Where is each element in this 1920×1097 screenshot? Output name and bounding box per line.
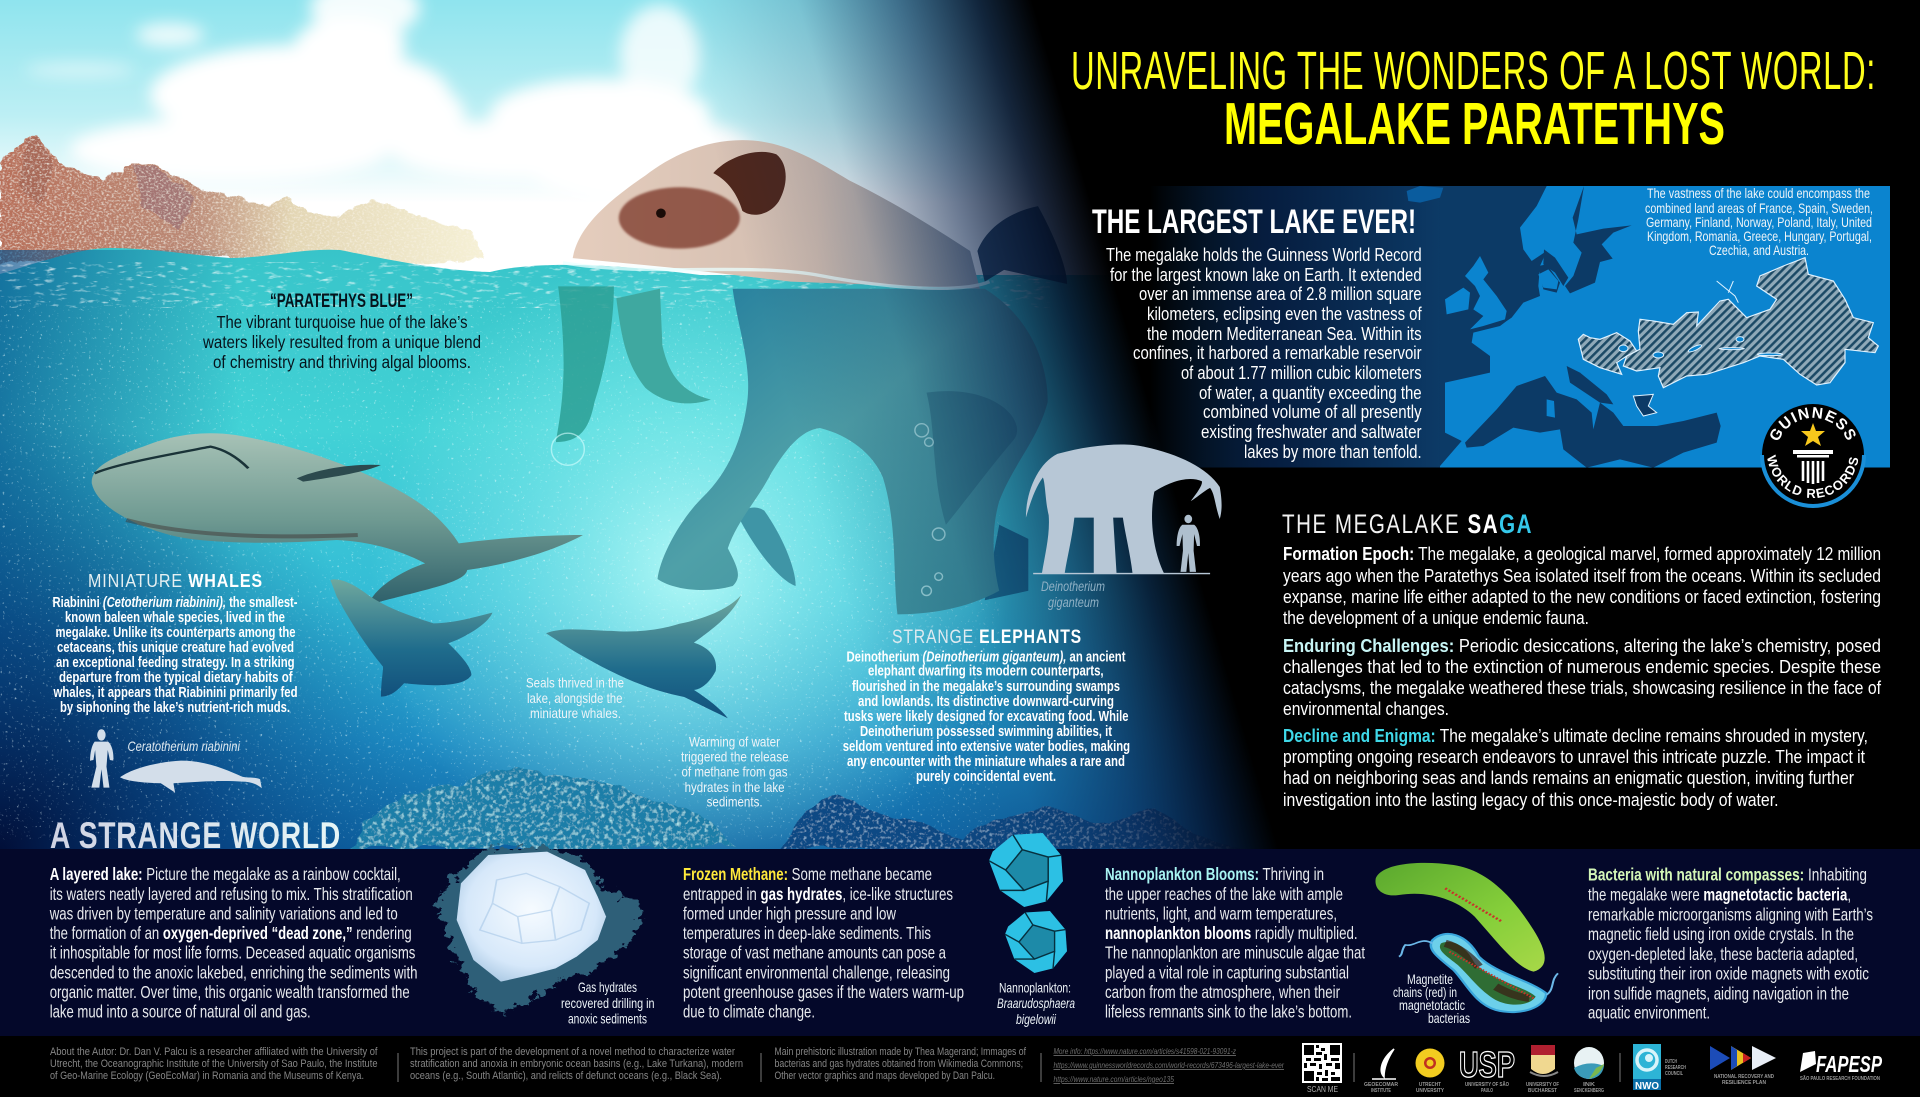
heading: miniature whales: MINIATURE WHALES bbox=[88, 570, 263, 591]
logo: University of Bucharest: UNIVERSITY OF bbox=[1526, 1082, 1559, 1088]
paragraph: enduring challenges: environmental changes. bbox=[1283, 699, 1449, 719]
icon: nannoplankton: Braarudosphaera bbox=[997, 995, 1075, 1011]
text block: whales: an exceptional feeding strategy. In a striking bbox=[56, 655, 295, 671]
image: gas hydrates: anoxic sediments bbox=[568, 1011, 647, 1027]
label: warming of water: of methane from gas bbox=[682, 764, 788, 780]
text block: whales: cetaceans, this unique creature had evolved bbox=[57, 640, 294, 656]
text block: nannoplankton blooms: the upper reaches of the lake with ample bbox=[1105, 884, 1343, 904]
label: seals: lake, alongside the bbox=[527, 690, 623, 706]
paragraph: decline and enigma bbox=[1283, 726, 1868, 810]
logo: NWO: COUNCIL bbox=[1665, 1071, 1683, 1077]
text block: saga bbox=[1283, 544, 1882, 810]
text block: nannoplankton blooms: played a vital role in capturing substantial bbox=[1105, 962, 1349, 982]
logo: FAPESP: FAPESP bbox=[1816, 1051, 1882, 1077]
footer bbox=[50, 1043, 1882, 1094]
footer text: about the author: of Geo-Marine Ecology (GeoEcoMar) in Romania and the Museums of Kenya. bbox=[50, 1070, 364, 1082]
logo: University of Sao Paulo: UNIVERSITY OF SÃO bbox=[1465, 1081, 1510, 1088]
text block: layered lake: the formation of an oxygen-deprived “dead zone,” rendering bbox=[50, 923, 412, 943]
text block: layered lake: descended to the anoxic lakebed, enriching the sediments with bbox=[50, 962, 417, 982]
logo: University of Bucharest bbox=[1526, 1045, 1559, 1094]
logo: GeoEcoMar bbox=[1364, 1049, 1398, 1094]
icon: Guinness World Records badge bbox=[1760, 404, 1866, 508]
text block: largest lake: combined volume of all presently bbox=[1203, 402, 1422, 422]
logo: GeoEcoMar: GEOECOMAR bbox=[1364, 1082, 1398, 1088]
image: magnetotactic bacteria bbox=[1375, 863, 1558, 1026]
main illustration: prehistoric lake scene bbox=[0, 0, 1400, 850]
text block: frozen methane: storage of vast methane amounts can pose a bbox=[683, 943, 946, 963]
Baltic Sea bbox=[1565, 186, 1632, 293]
text block: frozen methane: temperatures in deep-lake sediments. This bbox=[683, 923, 931, 943]
callout: Paratethys blue: of chemistry and thriving algal blooms. bbox=[213, 352, 471, 372]
text block: bacteria with natural compasses: Bacteria with natural compasses: Inhabiting bbox=[1588, 865, 1867, 885]
icon: Deinotherium size silhouette with human: Deinotherium bbox=[1041, 579, 1105, 594]
footer text: project: stratification and anoxia in embryonic ocean basins (e.g., Lake Turkana), modern bbox=[410, 1058, 743, 1070]
seal two bbox=[546, 595, 741, 718]
logo: NWO: DUTCH bbox=[1665, 1059, 1677, 1065]
label: warming of water: Warming of water bbox=[689, 734, 780, 750]
label: warming of water bbox=[681, 734, 789, 810]
icon: lower dodecahedron bbox=[1005, 911, 1067, 973]
paragraph: enduring challenges: Enduring Challenges: Periodic desiccations, altering the lake’s chemistry, posed bbox=[1283, 636, 1881, 656]
logo: University of Sao Paulo: PAULO bbox=[1481, 1088, 1493, 1094]
logo: national recovery and resilience plan: NATIONAL RECOVERY AND bbox=[1714, 1074, 1774, 1080]
hatched lake extent bbox=[1578, 258, 1878, 388]
paragraph: formation epoch: the development of a unique endemic fauna. bbox=[1283, 608, 1589, 628]
text block: frozen methane bbox=[683, 864, 964, 1022]
footer text: project: oceans (e.g., South Atlantic), and relicts of defunct oceans (e.g., Black Sea). bbox=[410, 1070, 722, 1082]
mountains bbox=[0, 136, 484, 263]
text block: largest lake bbox=[1106, 245, 1422, 462]
text block: largest lake: the modern Mediterranean Sea. Within its bbox=[1147, 324, 1422, 344]
logo: FAPESP bbox=[1800, 1051, 1882, 1082]
heading: the largest lake ever: THE LARGEST LAKE EVER! bbox=[1092, 203, 1416, 241]
callout: Paratethys blue bbox=[202, 291, 481, 372]
text block: elephants: purely coincidental event. bbox=[916, 769, 1056, 785]
footer text: project bbox=[410, 1046, 743, 1082]
text block: elephants: seldom ventured into extensive water bodies, making bbox=[843, 739, 1130, 755]
water body bbox=[0, 248, 1300, 850]
paragraph: enduring challenges bbox=[1283, 636, 1882, 719]
paragraph: decline and enigma: investigation into the lasting legacy of this once-majestic body of water. bbox=[1283, 790, 1778, 810]
text block: frozen methane: due to climate change. bbox=[683, 1002, 815, 1022]
sky with clouds bbox=[0, 0, 1300, 290]
logo: University of Bucharest: BUCHAREST bbox=[1528, 1088, 1558, 1094]
text block: largest lake: of water, a quantity exceeding the bbox=[1199, 383, 1422, 403]
panel: strange elephants bbox=[843, 627, 1130, 785]
text block: frozen methane: entrapped in gas hydrates, ice-like structures bbox=[683, 884, 953, 904]
text block: nannoplankton blooms: lifeless remnants sink to the lake’s bottom. bbox=[1105, 1002, 1352, 1022]
text block: layered lake bbox=[49, 864, 417, 1022]
text block: largest lake: for the largest known lake on Earth. It extended bbox=[1110, 265, 1422, 285]
image: gas hydrates: recovered drilling in bbox=[561, 995, 654, 1011]
text block: largest lake: existing freshwater and saltwater bbox=[1201, 422, 1422, 442]
text block: nannoplankton blooms bbox=[1105, 864, 1365, 1022]
callout: Paratethys blue: The vibrant turquoise hue of the lake’s bbox=[216, 312, 468, 332]
icon: nannoplankton bbox=[989, 833, 1075, 1027]
text block: layered lake: lake mud into a source of natural oil and gas. bbox=[50, 1002, 311, 1022]
image: magnetotactic bacteria: chains (red) in bbox=[1393, 984, 1457, 1000]
icon: Deinotherium size silhouette with human: giganteum bbox=[1048, 595, 1099, 610]
image: gas hydrates: Gas hydrates bbox=[578, 979, 637, 995]
panel: a strange world band bbox=[0, 815, 1920, 1036]
Mediterranean Sea bbox=[1465, 376, 1721, 468]
callout: Paratethys blue: “PARATETHYS BLUE” bbox=[270, 291, 413, 312]
heading: the megalake saga: THE MEGALAKE SAGA bbox=[1282, 509, 1533, 539]
footer text: more info links bbox=[1054, 1046, 1285, 1084]
logo: Utrecht University: UTRECHT bbox=[1419, 1082, 1442, 1088]
footer text: about the author bbox=[50, 1046, 378, 1082]
label: seals: Seals thrived in the bbox=[526, 674, 624, 690]
text block: elephants: elephant dwarfing its modern counterparts, bbox=[868, 664, 1104, 680]
text block: whales: whales, it appears that Riabinini primarily fed bbox=[53, 685, 298, 701]
text block: elephants: any encounter with the miniature whales a rare and bbox=[847, 754, 1125, 770]
text block: layered lake: it inhospitable for most life forms. Deceased aquatic organisms bbox=[50, 943, 416, 963]
text block: whales: known baleen whale species, lived in the bbox=[65, 610, 285, 626]
text block: largest lake: over an immense area of 2.8 million square bbox=[1139, 284, 1422, 304]
text block: elephants: Deinotherium possessed swimming abilities, it bbox=[860, 724, 1112, 740]
label: seals bbox=[526, 674, 624, 721]
text block: elephants: Deinotherium (Deinotherium giganteum), an ancient bbox=[846, 650, 1126, 666]
map panel: Europe with lake extent bbox=[1150, 185, 1890, 468]
image: gas hydrates bbox=[436, 847, 654, 1027]
logo: INK Senckenberg bbox=[1574, 1047, 1604, 1094]
icon: QR code bbox=[1302, 1043, 1342, 1094]
footer text: about the author: About the Autor: Dr. Dan V. Palcu is a researcher affiliated with the University of bbox=[50, 1046, 378, 1058]
fade to black over right side bbox=[0, 0, 1400, 850]
text block: layered lake: organic matter. Over time, this organic wealth transformed the bbox=[50, 982, 410, 1002]
icon: nannoplankton: bigelowii bbox=[1016, 1011, 1057, 1027]
text block: layered lake: its waters neatly layered and refusing to mix. This stratification bbox=[50, 884, 413, 904]
heading: a strange world: A STRANGE WORLD bbox=[50, 815, 341, 856]
text block: elephants: flourished in the megalake’s surrounding swamps bbox=[852, 679, 1120, 695]
paragraph: enduring challenges: challenges that led to the extinction of numerous endemic species. Despite these bbox=[1283, 657, 1881, 677]
callout: Paratethys blue: waters likely resulted from a unique blend bbox=[202, 332, 481, 352]
footer text: project: This project is part of the development of a novel method to characterize water bbox=[410, 1046, 735, 1058]
reef on the left of the lakebed bbox=[345, 770, 735, 849]
logo: INK Senckenberg: SENCKENBERG bbox=[1574, 1088, 1604, 1094]
footer text: more info links: https://www.nature.com/articles/ngeo135 bbox=[1054, 1074, 1174, 1084]
text block: frozen methane: potent greenhouse gases if the waters warm-up bbox=[683, 982, 964, 1002]
text block: nannoplankton blooms: The nannoplankton are minuscule algae that bbox=[1105, 943, 1365, 963]
text block: nannoplankton blooms: nannoplankton blooms rapidly multiplied. bbox=[1105, 923, 1358, 943]
size comparison: whale and human: Ceratotherium riabinini bbox=[128, 738, 241, 754]
footer text: credits bbox=[774, 1046, 1027, 1082]
logo: Utrecht University bbox=[1416, 1048, 1444, 1094]
size comparison: whale and human bbox=[90, 729, 262, 793]
logo: NWO: NWO bbox=[1635, 1080, 1659, 1092]
text block: nannoplankton blooms: carbon from the atmosphere, when their bbox=[1105, 982, 1340, 1002]
image: magnetotactic bacteria: bacterias bbox=[1428, 1010, 1470, 1026]
text block: layered lake: was driven by temperature and salinity variations and led to bbox=[49, 903, 398, 923]
image: magnetotactic bacteria: Magnetite bbox=[1407, 971, 1453, 987]
title bbox=[1071, 41, 1876, 157]
text block: bacteria with natural compasses: the megalake were magnetotactic bacteria, bbox=[1588, 885, 1851, 905]
map caption bbox=[1645, 185, 1873, 258]
logo: NWO bbox=[1633, 1044, 1686, 1092]
text block: largest lake: kilometers, eclipsing even the vastness of bbox=[1147, 304, 1422, 324]
logo: University of Sao Paulo: USP bbox=[1459, 1044, 1515, 1085]
seal one bbox=[330, 579, 492, 697]
text block: elephants bbox=[843, 650, 1130, 785]
text block: nannoplankton blooms: nutrients, light, and warm temperatures, bbox=[1105, 903, 1337, 923]
label: warming of water: triggered the release bbox=[681, 749, 789, 765]
icon: nannoplankton: Nannoplankton: bbox=[999, 980, 1071, 996]
logo: FAPESP: SÃO PAULO RESEARCH FOUNDATION bbox=[1800, 1075, 1880, 1082]
footer text: credits: Other vector graphics and maps developed by Dan Palcu. bbox=[774, 1070, 995, 1082]
text block: whales: Riabinini (Cetotherium riabinini), the smallest- bbox=[52, 595, 298, 611]
text block: whales: megalake. Unlike its counterparts among the bbox=[56, 625, 296, 641]
text block: layered lake: A layered lake: Picture the megalake as a rainbow cocktail, bbox=[50, 864, 401, 884]
logo: University of Sao Paulo bbox=[1459, 1044, 1515, 1094]
logo: national recovery and resilience plan bbox=[1710, 1046, 1776, 1086]
logo: Utrecht University: UNIVERSITY bbox=[1416, 1088, 1444, 1094]
text block: largest lake: The megalake holds the Guinness World Record bbox=[1106, 245, 1422, 265]
text block: elephants: tusks were likely designed for excavating food. While bbox=[844, 709, 1128, 725]
footer text: more info links: https://www.guinnessworldrecords.com/world-records/673496-largest-lake-ever bbox=[1054, 1060, 1285, 1070]
panel: miniature whales bbox=[52, 570, 298, 793]
heading: strange elephants: STRANGE ELEPHANTS bbox=[892, 627, 1082, 648]
map caption: Czechia, and Austria. bbox=[1709, 242, 1809, 258]
giant elephant Deinotherium bbox=[551, 140, 1067, 614]
footer text: credits: Main prehistoric illustration made by Thea Magerand; Immages of bbox=[774, 1046, 1027, 1058]
dark lakebed rocks bbox=[779, 793, 1243, 849]
logo: national recovery and resilience plan: RESILIENCE PLAN bbox=[1722, 1080, 1766, 1086]
logo: INK Senckenberg: INK bbox=[1583, 1082, 1595, 1088]
text block: bacteria with natural compasses bbox=[1588, 865, 1873, 1022]
text block: whales: departure from the typical dietary habits of bbox=[59, 670, 293, 686]
text block: largest lake: confines, it harbored a remarkable reservoir bbox=[1133, 343, 1422, 363]
text block: frozen methane: significant environmental challenge, releasing bbox=[683, 962, 950, 982]
baleen whale bbox=[92, 433, 583, 605]
icon: upper dodecahedron bbox=[989, 833, 1063, 907]
image: magnetotactic bacteria: magnetotactic bbox=[1399, 997, 1465, 1013]
label: warming of water: hydrates in the lake bbox=[685, 779, 785, 795]
paragraph: formation epoch bbox=[1283, 544, 1881, 628]
paragraph: decline and enigma: had on neighboring seas and lands remains an enigmatic question, inviting further bbox=[1283, 768, 1854, 788]
Atlantic and North Sea bbox=[1440, 186, 1547, 466]
label: seals: miniature whales. bbox=[530, 705, 621, 721]
text block: whales: by siphoning the lake’s nutrient-rich muds. bbox=[60, 700, 290, 716]
Adriatic Sea bbox=[1567, 366, 1613, 404]
label: warming of water: sediments. bbox=[707, 794, 763, 810]
logo: GeoEcoMar: INSTITUTE bbox=[1371, 1088, 1391, 1094]
text block: largest lake: lakes by more than tenfold. bbox=[1244, 442, 1422, 462]
icon: QR code: SCAN ME bbox=[1307, 1084, 1338, 1094]
footer text: credits: bacterias and gas hydrates obtained from Wikimedia Commons; bbox=[774, 1058, 1023, 1070]
icon: Guinness World Records badge: WORLD RECORDS bbox=[1767, 454, 1858, 498]
text block: whales bbox=[52, 595, 298, 716]
text block: bacteria with natural compasses: aquatic environment. bbox=[1588, 1002, 1710, 1022]
paragraph: decline and enigma: Decline and Enigma: The megalake’s ultimate decline remains shrouded in mystery, bbox=[1283, 726, 1868, 746]
logo: NWO: RESEARCH bbox=[1665, 1065, 1686, 1071]
text block: frozen methane: formed under high pressure and low bbox=[683, 903, 896, 923]
text block: largest lake: of about 1.77 million cubic kilometers bbox=[1181, 363, 1422, 383]
text block: nannoplankton blooms: Nannoplankton Blooms: Thriving in bbox=[1105, 864, 1324, 884]
text block: frozen methane: Frozen Methane: Some methane became bbox=[683, 864, 932, 884]
footer text: more info links: More info: https://www.nature.com/articles/s41598-021-93091-z bbox=[1054, 1046, 1237, 1056]
icon: Deinotherium size silhouette with human bbox=[1026, 444, 1222, 610]
footer text: about the author: Utrecht, the Oceanographic Institute of the University of Sao Paulo, the Institute bbox=[50, 1058, 378, 1070]
icon: Guinness World Records badge: GUINNESS bbox=[1770, 407, 1856, 440]
text block: elephants: and lowlands. Its distinctive downward-curving bbox=[858, 694, 1114, 710]
